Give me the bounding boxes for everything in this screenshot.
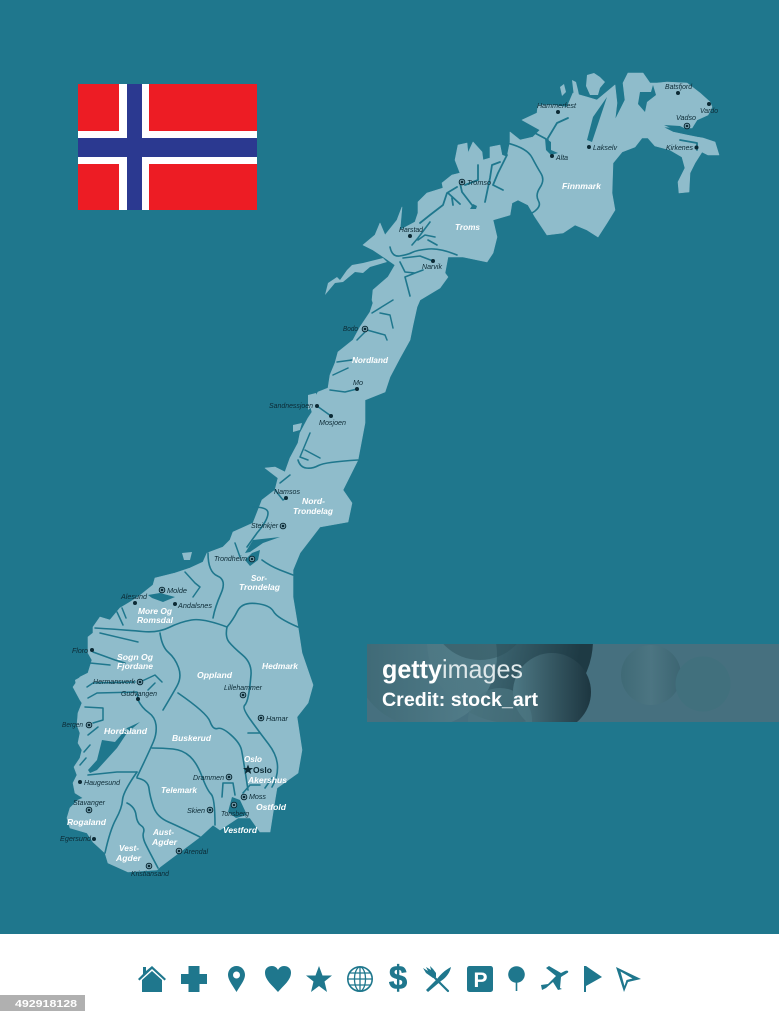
- county labels: Trondelag: [239, 582, 281, 592]
- watermark banner: [367, 644, 779, 722]
- fjords: [80, 85, 697, 818]
- city labels: [60, 84, 718, 878]
- county labels: Oslo: [244, 754, 262, 764]
- icon band: [0, 934, 779, 1024]
- watermark banner: Credit: stock_art: [382, 690, 539, 711]
- city labels: Skien: [187, 808, 205, 815]
- islands: [75, 73, 605, 686]
- city labels: Egersund: [60, 836, 92, 843]
- city labels: Namsos: [274, 489, 300, 496]
- icon: navigation arrow: [616, 967, 641, 992]
- city labels: Kirkenes: [666, 145, 693, 152]
- city labels: Mo: [353, 380, 363, 387]
- county labels: Nordland: [352, 355, 389, 365]
- city labels: Gudvangen: [121, 691, 157, 698]
- city labels: Vadso: [676, 115, 696, 122]
- city labels: Batsfjord: [665, 84, 693, 91]
- city labels: Alta: [555, 155, 568, 162]
- land mass: [67, 73, 719, 872]
- city labels: Hamar: [266, 716, 289, 723]
- icon: home: [138, 966, 166, 992]
- county labels: Troms: [455, 222, 480, 232]
- county labels: Sor-: [251, 573, 267, 583]
- county labels: Agder: [151, 837, 178, 847]
- map of Norway: [60, 73, 719, 878]
- county labels: Sogn Og: [117, 652, 154, 662]
- city labels: Andalsnes: [177, 603, 213, 610]
- city labels: Arendal: [183, 849, 208, 856]
- flag of Norway: [78, 84, 257, 210]
- county labels: Vest-: [119, 843, 139, 853]
- icon: heart: [265, 966, 291, 992]
- county labels: Buskerud: [172, 733, 212, 743]
- city labels: Lillehammer: [224, 685, 263, 692]
- watermark banner: images: [442, 654, 523, 684]
- county labels: Fjordane: [117, 661, 153, 671]
- region borders: [88, 143, 543, 868]
- city labels: Drammen: [193, 775, 224, 782]
- icon: map pin: [228, 966, 245, 992]
- city labels: Moss: [249, 794, 266, 801]
- major city ring markers: [86, 123, 690, 869]
- county labels: Vestford: [223, 825, 258, 835]
- county labels: More Og: [138, 606, 173, 616]
- county labels: Telemark: [161, 785, 198, 795]
- county labels: [67, 181, 602, 863]
- county labels: Ostfold: [256, 802, 287, 812]
- county labels: Nord-: [302, 496, 325, 506]
- county labels: Hordaland: [104, 726, 148, 736]
- county labels: Trondelag: [293, 506, 334, 516]
- icon: airplane: [541, 966, 568, 990]
- county labels: Hedmark: [262, 661, 299, 671]
- icon: flag: [584, 966, 602, 992]
- city labels: Molde: [167, 588, 187, 595]
- city labels: Trondheim: [214, 556, 247, 563]
- city labels: Harstad: [399, 227, 424, 234]
- county labels: Rogaland: [67, 817, 107, 827]
- county labels: Agder: [115, 853, 142, 863]
- capital: Oslo: [243, 764, 272, 775]
- county labels: Oppland: [197, 670, 233, 680]
- icon: parking: [467, 966, 493, 992]
- image id tag: 492918128: [15, 998, 77, 1010]
- city labels: Lakselv: [593, 145, 618, 152]
- icon: dollar: $: [389, 959, 407, 996]
- icon: globe: [348, 967, 372, 991]
- county labels: Finnmark: [562, 181, 602, 191]
- city labels: Sandnessjoen: [269, 403, 313, 410]
- city labels: Bodo: [343, 326, 358, 333]
- county labels: Aust-: [152, 827, 174, 837]
- city labels: Kristiansand: [131, 871, 170, 878]
- image id tag: [0, 995, 85, 1011]
- city labels: Steinkjer: [251, 523, 279, 530]
- city labels: Hammerfest: [537, 103, 577, 110]
- city labels: Tonsberg: [221, 811, 249, 818]
- city labels: Stavanger: [73, 800, 106, 807]
- city labels: Tromso: [467, 180, 491, 187]
- city markers: [78, 91, 711, 841]
- county labels: Akershus: [247, 775, 287, 785]
- city labels: Alesund: [120, 594, 148, 601]
- watermark text: getty: [382, 654, 443, 684]
- icon: plus: [181, 966, 207, 992]
- county labels: Romsdal: [137, 615, 174, 625]
- city labels: Hermansverk: [93, 679, 136, 686]
- city labels: Vardo: [700, 108, 718, 115]
- city labels: Floro: [72, 648, 88, 655]
- capital: Oslo: Oslo: [253, 765, 272, 775]
- icon: fork and knife: [423, 966, 451, 992]
- icon: star: [306, 966, 332, 992]
- icon: parking: P: [473, 969, 488, 992]
- icon: pushpin: [508, 966, 525, 991]
- city labels: Narvik: [422, 264, 442, 271]
- city labels: Haugesund: [84, 780, 121, 787]
- city labels: Bergen: [62, 722, 83, 729]
- icon row: [138, 959, 641, 996]
- city labels: Mosjoen: [319, 420, 346, 427]
